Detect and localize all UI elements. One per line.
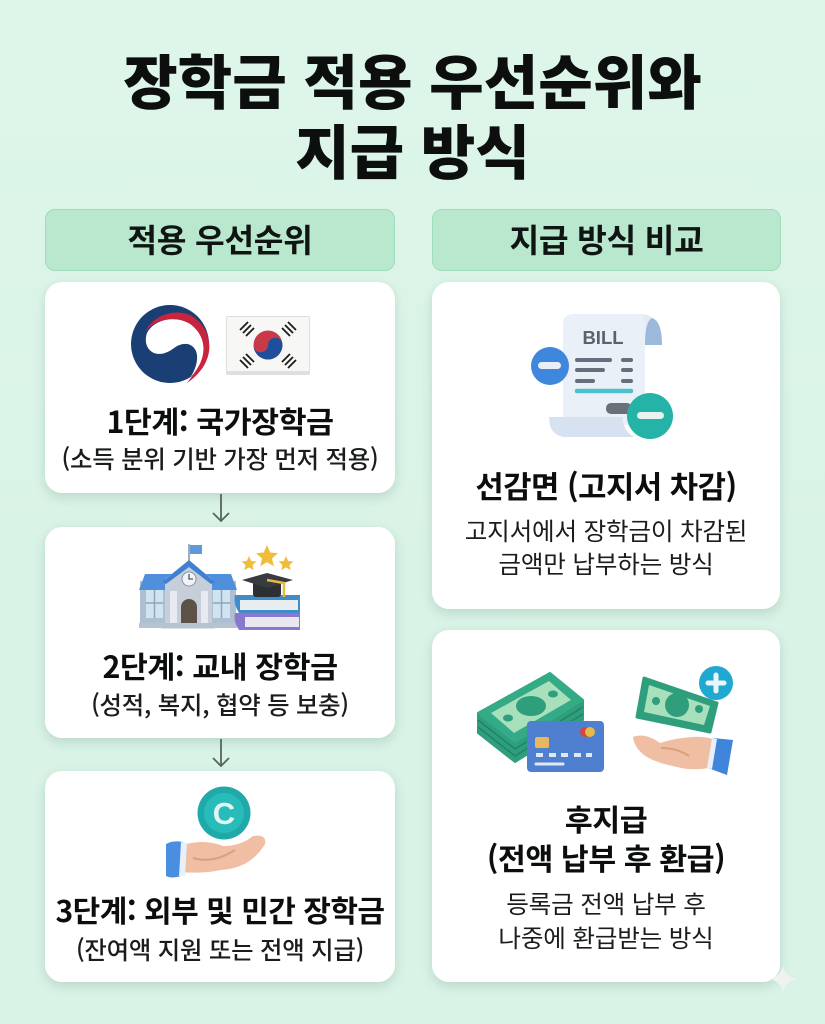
- icon: coin over hand: [166, 786, 266, 878]
- heading: priority: [45, 209, 395, 271]
- icon: bill with minus badges: [531, 314, 673, 439]
- icon: hand receiving money: [633, 666, 733, 775]
- upfront description: 금액만 납부하는 방식: [498, 545, 714, 581]
- upfront description: [465, 512, 747, 581]
- later payment description: [498, 885, 714, 955]
- icon: sparkle watermark: [770, 966, 796, 992]
- step 3 description: (잔여액 지원 또는 전액 지급): [76, 932, 364, 967]
- later payment description: 나중에 환급받는 방식: [498, 919, 714, 955]
- step 3 heading: 3단계: 외부 및 민간 장학금: [55, 887, 385, 931]
- panel: step 2: [45, 527, 395, 738]
- icon: coin over hand: C: [213, 796, 235, 831]
- panel: step 1: [45, 282, 395, 493]
- icon: cash stack and card: [477, 672, 604, 772]
- title: 장학금 적용 우선순위와: [123, 36, 702, 122]
- icon: bill with minus badges: BILL: [582, 327, 624, 348]
- panel: later payment: [432, 630, 780, 982]
- later payment heading: 후지급: [565, 796, 647, 840]
- panel: upfront reduction: [432, 282, 780, 609]
- later payment description: 등록금 전액 납부 후: [506, 885, 706, 921]
- icon: government emblem: [131, 305, 210, 383]
- icon: school and books: [139, 544, 300, 630]
- heading: priority: 적용 우선순위: [127, 216, 313, 262]
- later payment heading: (전액 납부 후 환급): [487, 835, 725, 879]
- heading: payment comparison: [432, 209, 781, 271]
- arrow: step 2 to 3: [212, 739, 230, 768]
- later payment heading: [487, 796, 725, 879]
- title: 지급 방식: [295, 106, 530, 192]
- step 1 heading: 1단계: 국가장학금: [106, 398, 334, 442]
- step 2 description: (성적, 복지, 협약 등 보충): [91, 687, 349, 722]
- step 1 description: (소득 분위 기반 가장 먼저 적용): [62, 441, 378, 476]
- step 2 heading: 2단계: 교내 장학금: [102, 643, 338, 687]
- title: [123, 36, 702, 192]
- upfront description: 고지서에서 장학금이 차감된: [465, 512, 747, 548]
- icon: Korean flag: [226, 316, 310, 375]
- panel: step 3: [45, 771, 395, 982]
- heading: payment comparison: 지급 방식 비교: [510, 216, 703, 262]
- arrow: step 1 to 2: [212, 494, 230, 522]
- upfront heading: 선감면 (고지서 차감): [475, 462, 737, 507]
